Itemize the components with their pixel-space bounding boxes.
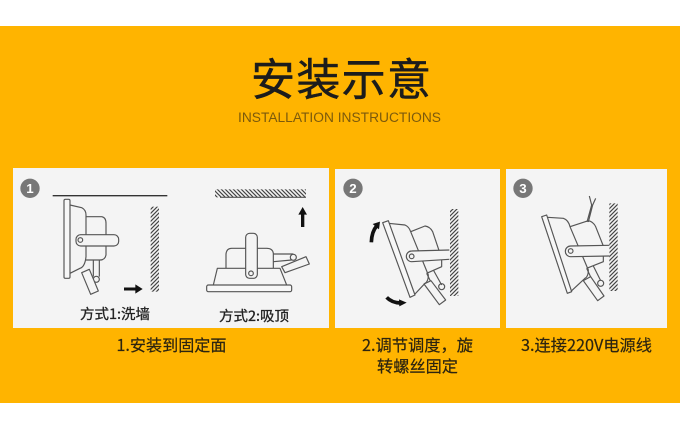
step badge 3: 3 bbox=[519, 181, 527, 196]
caption 2 bbox=[362, 332, 473, 377]
step badge 2: 2 bbox=[349, 181, 357, 196]
arrow: rotate upward bbox=[371, 222, 380, 242]
wall hatch bbox=[151, 207, 159, 292]
lamp: tilted bbox=[383, 221, 449, 305]
step badge 1: 1 bbox=[26, 181, 34, 196]
subtitle: INSTALLATION INSTRUCTIONS bbox=[238, 110, 441, 125]
lamp: ceiling mounting bbox=[207, 233, 309, 292]
wall hatch bbox=[609, 203, 618, 291]
arrow: rotate downward bbox=[387, 297, 407, 306]
label: method 1: 方式1:洗墙 bbox=[80, 304, 150, 324]
arrow: upward bbox=[298, 213, 308, 227]
title: 安装示意 bbox=[251, 44, 431, 108]
caption 3: 3.连接220V电源线 bbox=[521, 332, 652, 356]
wall hatch bbox=[450, 209, 458, 296]
panel 3: wiring bbox=[506, 169, 667, 328]
caption 1: 1.安装到固定面 bbox=[116, 332, 226, 356]
label: method 2: 方式2:吸顶 bbox=[219, 306, 289, 326]
ceiling hatch bbox=[215, 189, 306, 197]
power wires bbox=[587, 196, 596, 222]
caption 2: 2.调节调度，旋 bbox=[362, 332, 473, 356]
arrow: toward wall bbox=[124, 284, 136, 293]
reference line bbox=[53, 194, 167, 198]
arrow head: upward bbox=[298, 207, 307, 215]
lamp: wall wash mounting bbox=[64, 199, 119, 294]
lamp: wired bbox=[542, 215, 609, 301]
panel 2: adjust bbox=[335, 169, 500, 328]
panel 1: mounting bbox=[13, 168, 329, 328]
caption 2: 转螺丝固定 bbox=[377, 353, 458, 377]
arrow head: toward wall bbox=[135, 284, 143, 294]
step badge 1 bbox=[20, 179, 40, 198]
